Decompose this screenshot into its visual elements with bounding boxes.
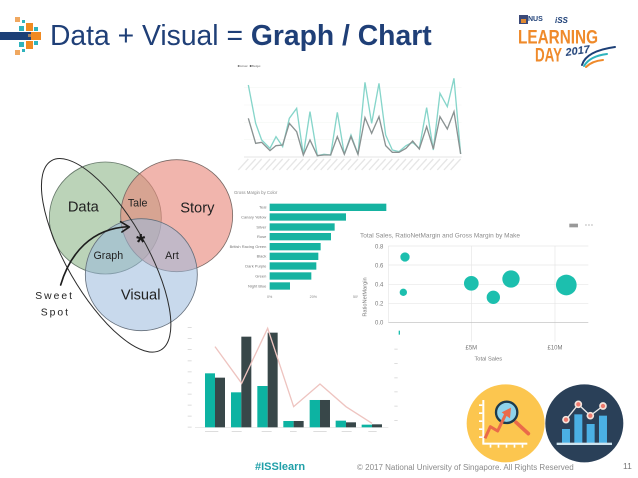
- scatter toolbar icons: [569, 224, 593, 227]
- scatter y ticks: [375, 244, 384, 327]
- label: Tale: Tale: [128, 198, 147, 210]
- circle: Visual: [85, 219, 197, 331]
- hashtag: #ISSlearn: [255, 461, 305, 473]
- sweet spot ellipse: [17, 141, 195, 370]
- icon: magnifier chart: [467, 384, 545, 462]
- bar chart title: Gross Margin by Color: [234, 190, 278, 195]
- scatter x ticks: [465, 345, 562, 351]
- page number: 11: [623, 461, 632, 471]
- logo: NUS and ISS marks: iSS: [555, 16, 569, 25]
- line chart: [238, 64, 462, 170]
- scatter y ticks: 0.4: [375, 283, 384, 289]
- x axis tick labels: [238, 159, 461, 170]
- circle: Story: [121, 160, 233, 272]
- logo: Day text: DAY: [535, 44, 562, 66]
- scatter title: Total Sales, RatioNetMargin and Gross Margin by Make: [360, 232, 520, 239]
- label: Sweet Spot: [35, 291, 74, 319]
- scatter grid: [388, 246, 588, 342]
- pink line: [215, 328, 372, 423]
- scatter x ticks: £10M: [547, 345, 562, 351]
- scatter bubbles: [400, 252, 577, 304]
- sweet spot arrow: [61, 222, 129, 285]
- icon: bar and line chart badge: [545, 384, 623, 462]
- bar axis labels: [267, 295, 361, 299]
- label: Sweet Spot: Spot: [41, 308, 70, 319]
- logo: NUS and ISS marks: NUS: [528, 16, 543, 23]
- scatter y ticks: 0.6: [375, 263, 384, 269]
- label: Art: Art: [165, 250, 179, 262]
- icon: header pixel bar: [0, 17, 41, 55]
- label: Sweet Spot: Sweet: [35, 291, 74, 302]
- logo: Learning text: LEARNING: [518, 26, 598, 48]
- scatter x ticks: £5M: [465, 345, 477, 351]
- logo: swooshes: [582, 47, 615, 67]
- bar labels: [230, 205, 267, 288]
- label: Story: Story: [180, 200, 215, 216]
- bar labels: Silver: [256, 224, 267, 229]
- copyright footer: © 2017 National University of Singapore. All Rights Reserved: [357, 463, 574, 472]
- bar labels: British Racing Green: [230, 244, 266, 249]
- title: Data + Visual = Graph / Chart: [50, 19, 432, 51]
- bar labels: Night Blue: [248, 283, 267, 288]
- logo: Learning Day 2017: [518, 15, 615, 67]
- horizontal bar chart: [230, 190, 386, 299]
- star marker: *: [136, 229, 146, 255]
- combo bar and line chart: [188, 327, 398, 432]
- label: Visual: Visual: [121, 288, 160, 304]
- bar labels: Teal: [259, 205, 266, 210]
- bar axis labels: 0%: [267, 295, 273, 299]
- logo: NUS and ISS marks: [519, 15, 569, 25]
- dark bars: [215, 333, 382, 427]
- scatter x label: Total Sales: [474, 356, 502, 362]
- line chart legend: Actual: [240, 64, 248, 68]
- teal bars: [205, 373, 372, 427]
- gray series: [248, 112, 461, 156]
- scatter y ticks: 0.8: [375, 244, 384, 250]
- line chart legend: Budget: [252, 64, 261, 68]
- scatter bubble chart: [358, 223, 600, 365]
- combo chart axis ticks: [188, 327, 398, 432]
- scatter y ticks: 0.2: [375, 302, 384, 308]
- bar axis labels: 20%: [310, 295, 318, 299]
- bar axis labels: 50%: [353, 295, 361, 299]
- bar labels: Black: [257, 254, 266, 259]
- teal series: [248, 78, 461, 156]
- bar labels: Rose: [257, 234, 267, 239]
- circle: Data: [49, 162, 161, 274]
- bars: [270, 204, 386, 290]
- label: Graph: Graph: [94, 250, 123, 262]
- bar labels: Green: [255, 273, 266, 278]
- scatter y label: RatioNetMargin: [363, 277, 369, 317]
- line chart legend: [238, 64, 261, 68]
- bar labels: Dark Purple: [245, 263, 267, 268]
- venn diagram: [17, 141, 233, 370]
- bar labels: Canary Yellow: [241, 214, 266, 219]
- label: Data: Data: [68, 200, 100, 216]
- logo: 2017 text: 2017: [564, 44, 592, 59]
- scatter y ticks: 0.0: [375, 321, 384, 327]
